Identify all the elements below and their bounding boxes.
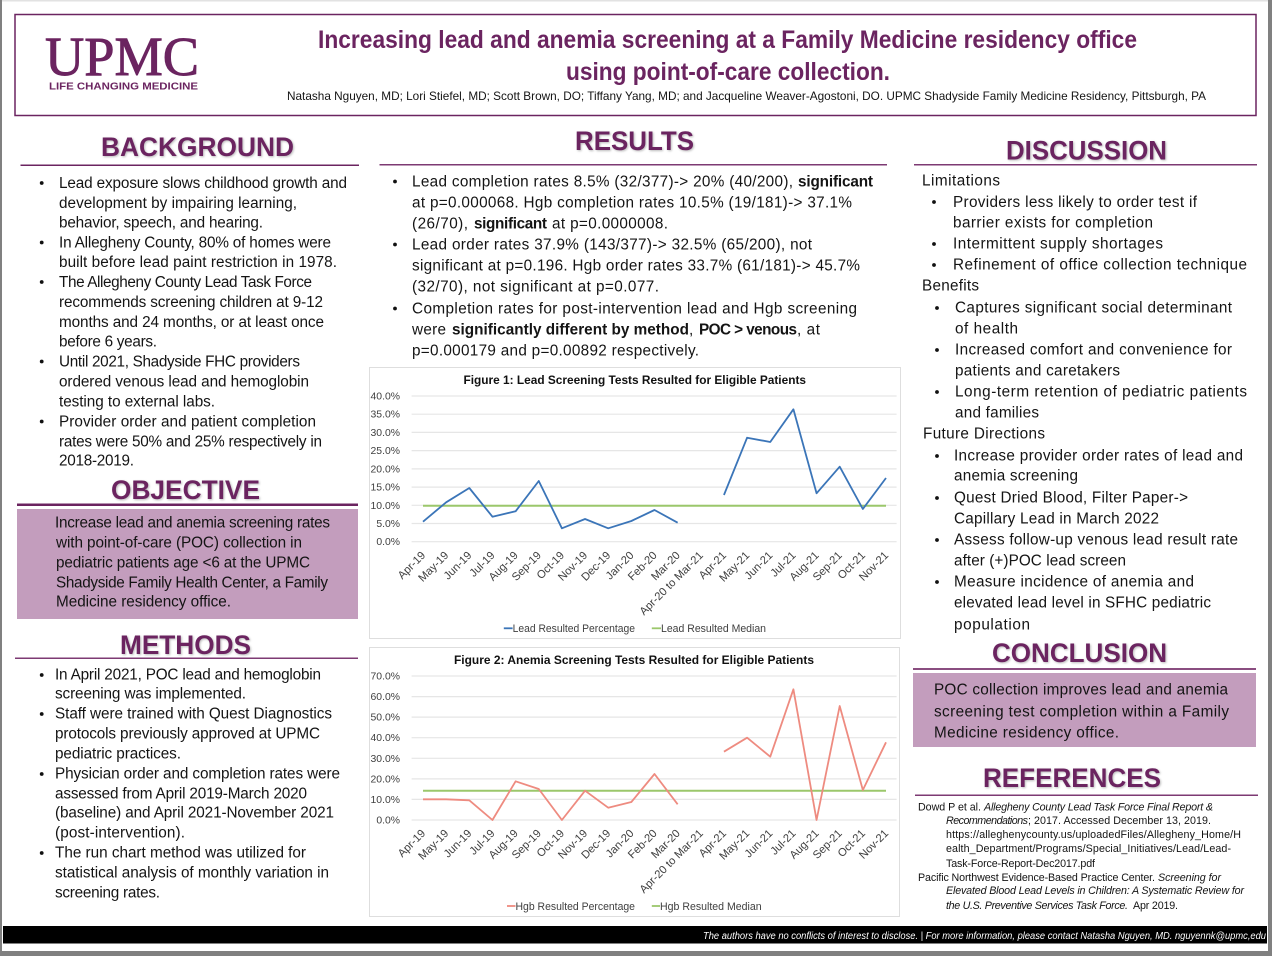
objective callout: Medicine residency office. (56, 594, 231, 611)
methods bullet list: (baseline) and April 2021-November 2021 (55, 805, 334, 822)
limitations: barrier exists for completion (953, 215, 1153, 232)
results bullet list: significant at p=0.196. Hgb order rates 33.7% (61/181)-> 45.7% (412, 258, 860, 275)
results bullet list: Lead completion rates 8.5% (32/377)-> 20% (40/200), (412, 174, 793, 191)
y axis labels: 60.0% (371, 692, 400, 703)
results bullet list: significantly different by method (452, 322, 689, 339)
panel: results (380, 126, 887, 360)
benefits: Increased comfort and convenience for (955, 342, 1232, 359)
chart title: figure 1: Figure 1: Lead Screening Tests Resulted for Eligible Patients (464, 373, 806, 387)
y axis labels: 70.0% (371, 672, 400, 682)
y axis labels: 10.0% (371, 795, 400, 806)
y axis labels (371, 392, 400, 548)
references list: https://alleghenycounty.us/uploadedFiles/Allegheny_Home/H (946, 829, 1241, 841)
references list: Screening for (1158, 872, 1221, 884)
limitations (922, 173, 1247, 274)
results bullet list: were (411, 322, 446, 339)
benefits: of health (955, 321, 1018, 338)
footer bar (3, 926, 1267, 944)
future directions (923, 425, 1243, 634)
x axis labels: Nov-21 (857, 828, 891, 862)
conclusion callout: Medicine residency office. (934, 725, 1119, 742)
hgb percentage series (423, 689, 886, 820)
x axis labels: Jun-19 (442, 550, 474, 582)
methods bullet list: screening was implemented. (55, 686, 246, 703)
panel: methods (15, 630, 358, 902)
y axis labels: 0.0% (376, 816, 400, 826)
y axis labels: 20.0% (371, 774, 400, 785)
results bullet list (393, 174, 873, 360)
future directions: elevated lead level in SFHC pediatric (954, 595, 1211, 612)
x axis labels: Jul-19 (468, 550, 498, 580)
x axis labels: Mar-20 (649, 550, 683, 583)
panel: conclusion (913, 638, 1256, 747)
background bullet list (40, 175, 347, 470)
x axis labels: Jul-21 (768, 550, 799, 580)
x axis labels: Nov-19 (556, 828, 590, 862)
limitations: Providers less likely to order test if (953, 194, 1198, 211)
background bullet list: In Allegheny County, 80% of homes were (59, 234, 331, 251)
background bullet list: development by impairing learning, (59, 195, 297, 212)
future directions: Measure incidence of anemia and (954, 574, 1194, 591)
heading: discussion: DISCUSSION (1006, 136, 1167, 166)
y axis labels: 20.0% (371, 464, 400, 475)
heading: results: RESULTS (575, 126, 694, 156)
panel: references (915, 763, 1258, 912)
logo: UPMC: LIFE CHANGING MEDICINE (49, 82, 198, 92)
y axis labels: 30.0% (371, 428, 400, 439)
future directions: Assess follow-up venous lead result rate (954, 532, 1238, 549)
y axis labels: 0.0% (376, 537, 400, 548)
methods bullet list (40, 667, 340, 902)
x axis labels: Jun-21 (743, 828, 775, 860)
conclusion callout (913, 673, 1256, 747)
future directions: Capillary Lead in March 2022 (954, 511, 1159, 528)
background bullet list: testing to external labs. (59, 393, 215, 410)
methods bullet list: screening rates. (55, 885, 160, 902)
references list: Pacific Northwest Evidence-Based Practice Center. (918, 872, 1155, 884)
x axis labels: Dec-19 (579, 550, 613, 584)
background bullet list: ordered venous lead and hemoglobin (59, 373, 309, 390)
legend (504, 623, 766, 635)
legend: Lead Resulted Percentage (513, 623, 635, 635)
x axis labels: Aug-21 (788, 828, 822, 862)
x axis labels: Feb-20 (626, 828, 660, 861)
x axis labels: Aug-19 (487, 550, 521, 584)
methods bullet list: Physician order and completion rates were (55, 766, 340, 783)
references list: ealth_Department/Programs/Special_Initiatives/Lead/Lead- (946, 843, 1231, 855)
results bullet list: Completion rates for post-intervention lead and Hgb screening (412, 301, 857, 318)
x axis labels: Nov-19 (556, 550, 590, 584)
y axis labels (371, 672, 400, 826)
x axis labels: Dec-19 (579, 828, 613, 862)
references list: Elevated Blood Lead Levels in Children: A Systematic Review for (946, 885, 1244, 897)
background bullet list: before 6 years. (59, 334, 157, 351)
chart: figure 1 lead screening (370, 368, 900, 638)
methods bullet list: (post-intervention). (55, 825, 185, 842)
x axis labels: Feb-20 (626, 550, 660, 583)
x axis labels: Jul-19 (468, 828, 498, 858)
objective callout: pediatric patients age <6 at the UPMC (56, 555, 310, 572)
results bullet list: p=0.000179 and p=0.00892 respectively. (412, 343, 699, 360)
limitations: Refinement of office collection technique (953, 257, 1247, 274)
panel: background (20, 132, 359, 470)
references list: Apr 2019. (1133, 900, 1178, 912)
legend: Lead Resulted Median (661, 623, 766, 635)
logo: UPMC: UPMC (45, 26, 199, 87)
background bullet list: months and 24 months, or at least once (59, 314, 324, 331)
future directions: Increase provider order rates of lead and (954, 448, 1243, 465)
methods bullet list: Staff were trained with Quest Diagnostics (55, 706, 332, 723)
references list: Recommendations (946, 815, 1029, 827)
results bullet list: significant (798, 174, 873, 191)
references list: Allegheny County Lead Task Force Final Report & (983, 802, 1213, 814)
x axis labels: Apr-20 to Mar-21 (638, 550, 706, 618)
results bullet list: , (689, 322, 693, 339)
references list: the U.S. Preventive Services Task Force. (946, 900, 1128, 912)
results bullet list: (26/70), (412, 216, 468, 233)
results bullet list: at p=0.000068. Hgb completion rates 10.5% (19/181)-> 37.1% (412, 195, 852, 212)
x axis labels: Jun-19 (442, 828, 474, 860)
x axis labels (396, 828, 891, 896)
references list: 2017. Accessed December 13, 2019. (1034, 815, 1211, 827)
panel: objective (17, 475, 358, 619)
background bullet list: rates were 50% and 25% respectively in (59, 433, 322, 450)
legend: Hgb Resulted Percentage (516, 901, 635, 913)
x axis labels: May-21 (717, 828, 752, 863)
conclusion callout: screening test completion within a Family (934, 704, 1229, 721)
x axis labels: May-19 (416, 550, 451, 585)
results bullet list: at p=0.0000008. (552, 216, 668, 233)
benefits (922, 278, 1247, 422)
x axis labels: Jun-21 (743, 550, 775, 582)
heading: background: BACKGROUND (101, 132, 294, 162)
results bullet list: Lead order rates 37.9% (143/377)-> 32.5% (65/200), not (412, 237, 813, 254)
benefits: and families (955, 405, 1039, 422)
background bullet list: Until 2021, Shadyside FHC providers (59, 353, 300, 370)
chart title: figure 2: Figure 2: Anemia Screening Tests Resulted for Eligible Patients (454, 653, 814, 667)
x axis labels: Apr-21 (697, 828, 729, 860)
x axis labels: Mar-20 (649, 828, 683, 861)
y axis labels: 40.0% (371, 392, 400, 402)
references list (918, 802, 1244, 912)
results bullet list: significant (474, 216, 547, 233)
legend: Hgb Resulted Median (660, 901, 762, 913)
legend (507, 901, 762, 913)
limitations: Intermittent supply shortages (953, 236, 1163, 253)
x axis labels: Jan-20 (604, 550, 636, 582)
median line (423, 505, 886, 507)
references list: Dowd P et al. (918, 802, 981, 814)
background bullet list: Provider order and patient completion (59, 413, 316, 430)
x axis labels: Apr-19 (396, 550, 428, 582)
methods bullet list: In April 2021, POC lead and hemoglobin (55, 667, 321, 684)
future directions: population (954, 617, 1030, 634)
title: Increasing lead and anemia screening at a Family Medicine residency office (318, 26, 1137, 54)
methods bullet list: protocols previously approved at UPMC (55, 726, 320, 743)
references list: Task-Force-Report-Dec2017.pdf (946, 858, 1095, 870)
background bullet list: behavior, speech, and hearing. (59, 215, 263, 232)
future directions: Quest Dried Blood, Filter Paper-> (954, 490, 1188, 507)
y axis labels: 5.0% (376, 519, 400, 530)
header banner (15, 14, 1256, 116)
results bullet list: POC > venous (699, 322, 797, 339)
x axis labels: Sep-19 (510, 828, 544, 862)
background bullet list: 2018-2019. (59, 453, 134, 470)
background bullet list: built before lead paint restriction in 1978. (59, 254, 337, 271)
x axis labels: Sep-21 (811, 828, 845, 862)
benefits: Long-term retention of pediatric patients (955, 384, 1247, 401)
methods bullet list: pediatric practices. (55, 746, 181, 763)
x axis labels: Jan-20 (604, 828, 636, 860)
objective callout: Increase lead and anemia screening rates (55, 515, 330, 532)
x axis labels: May-19 (416, 828, 451, 863)
methods bullet list: The run chart method was utilized for (55, 845, 306, 862)
benefits: Captures significant social determinant (955, 300, 1233, 317)
results bullet list: (32/70), not significant at p=0.077. (412, 279, 659, 296)
x axis labels: Sep-21 (811, 550, 845, 584)
limitations: Limitations (922, 173, 1000, 190)
authors: Natasha Nguyen, MD; Lori Stiefel, MD; Scott Brown, DO; Tiffany Yang, MD; and Jacqueline Weaver-Agostoni, DO. UPMC Shadyside Family Medicine Residency, Pittsburgh, PA (287, 90, 1206, 103)
x axis labels: Apr-20 to Mar-21 (638, 828, 706, 896)
x axis labels: Apr-19 (396, 828, 428, 860)
references list: ; (1028, 815, 1031, 827)
title (318, 26, 1137, 86)
benefits: Benefits (922, 278, 979, 295)
heading: conclusion: CONCLUSION (992, 638, 1167, 668)
x axis labels: Oct-21 (836, 828, 868, 860)
heading: references: REFERENCES (983, 763, 1161, 793)
x axis labels: Aug-19 (487, 828, 521, 862)
x axis labels (396, 550, 891, 618)
x axis labels: Apr-21 (697, 550, 729, 582)
conclusion callout: POC collection improves lead and anemia (934, 682, 1228, 699)
y axis labels: 15.0% (371, 483, 400, 494)
objective callout: Shadyside Family Health Center, a Family (56, 575, 328, 592)
background bullet list: Lead exposure slows childhood growth and (59, 175, 347, 192)
x axis labels: Aug-21 (788, 550, 822, 584)
x axis labels: May-21 (717, 550, 752, 585)
x axis labels: Nov-21 (857, 550, 891, 584)
y axis labels: 50.0% (371, 713, 400, 724)
future directions: Future Directions (923, 425, 1045, 442)
title: using point-of-care collection. (566, 58, 890, 86)
x axis labels: Oct-19 (535, 550, 567, 582)
objective callout (17, 509, 358, 619)
x axis labels: Oct-19 (535, 828, 567, 860)
results bullet list: , at (797, 322, 821, 339)
methods bullet list: assessed from April 2019-March 2020 (55, 786, 307, 803)
heading: methods: METHODS (120, 630, 251, 660)
panel: discussion (914, 136, 1257, 634)
background bullet list: The Allegheny County Lead Task Force (59, 274, 312, 291)
methods bullet list: statistical analysis of monthly variation in (55, 865, 329, 882)
heading: objective: OBJECTIVE (111, 475, 260, 505)
x axis labels: Sep-19 (510, 550, 544, 584)
objective callout: with point-of-care (POC) collection in (55, 535, 302, 552)
future directions: after (+)POC lead screen (954, 553, 1126, 570)
y axis labels: 30.0% (371, 754, 400, 765)
y axis labels: 10.0% (371, 501, 400, 512)
y axis labels: 40.0% (371, 733, 400, 744)
y axis labels: 25.0% (371, 446, 400, 457)
benefits: patients and caretakers (955, 363, 1120, 380)
chart: figure 2 anemia screening (370, 648, 900, 916)
x axis labels: Jul-21 (768, 828, 799, 858)
x axis labels: Oct-21 (836, 550, 868, 582)
y axis labels: 35.0% (371, 410, 400, 421)
background bullet list: recommends screening children at 9-12 (59, 294, 323, 311)
lead percentage series (423, 409, 886, 528)
median line (423, 790, 886, 792)
future directions: anemia screening (954, 468, 1078, 485)
